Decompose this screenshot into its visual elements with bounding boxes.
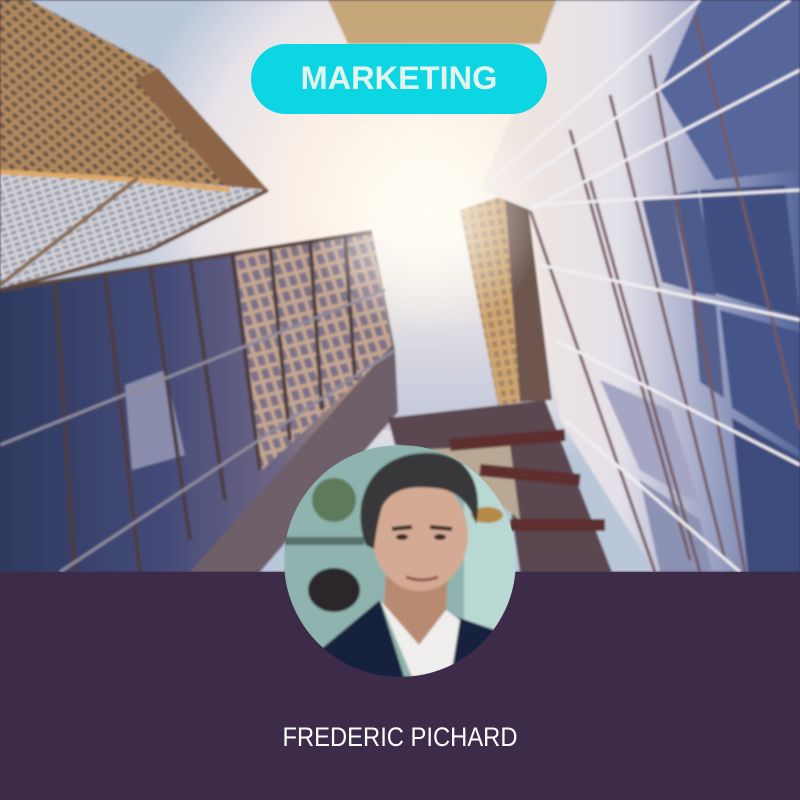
hair <box>360 453 478 549</box>
right glass building <box>480 0 800 572</box>
shirt <box>380 600 460 677</box>
name: FREDERIC PICHARD <box>283 722 517 752</box>
background photo: skyscrapers seen from below <box>0 0 800 572</box>
far right back building <box>388 195 612 572</box>
bottom panel <box>0 572 800 800</box>
lower-left glass building <box>0 232 398 572</box>
neck and face <box>384 570 448 645</box>
portrait <box>284 445 516 677</box>
category badge: MARKETING <box>301 60 497 96</box>
jacket <box>322 600 494 677</box>
top centre building <box>328 0 556 44</box>
sky <box>0 0 800 572</box>
category badge <box>251 44 547 114</box>
top-left building <box>0 0 268 290</box>
sun glow <box>0 0 800 572</box>
